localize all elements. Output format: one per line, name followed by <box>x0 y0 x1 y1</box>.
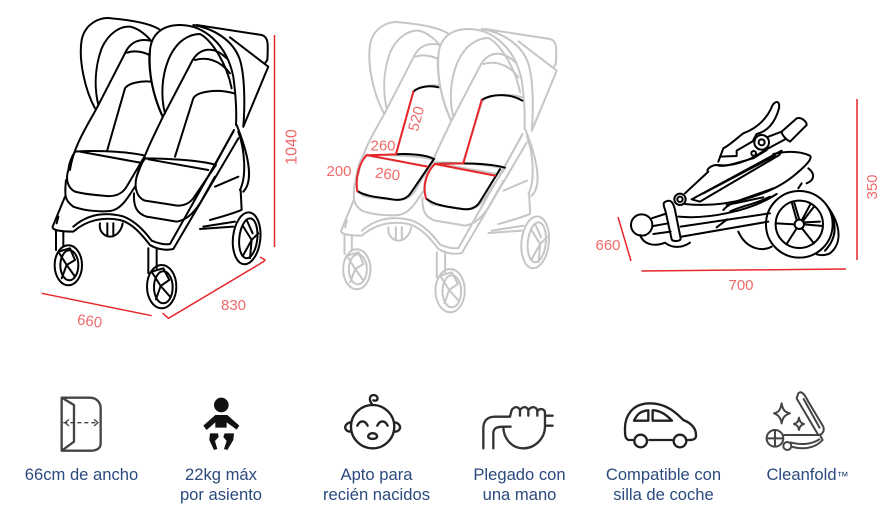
icon: car <box>625 403 696 447</box>
dimension line: width <box>618 217 631 261</box>
folded stroller with dimensions <box>595 99 881 294</box>
feature: suitable for newborns <box>323 395 430 504</box>
label: Cleanfold™ <box>766 465 849 484</box>
feature: 22kg per seat: por asiento <box>180 485 262 504</box>
dimension line: height <box>856 99 858 260</box>
label: 700: 700 <box>728 277 754 294</box>
icon: folding stroller with sparkles <box>767 392 824 450</box>
feature: suitable for newborns: recién nacidos <box>323 485 430 504</box>
label: 830: 830 <box>221 297 246 314</box>
stroller seat dimensions view <box>326 22 557 312</box>
label: 200: 200 <box>326 163 352 180</box>
icon: hand on handle <box>483 407 553 448</box>
rear wheel <box>738 191 839 258</box>
label: 260 upper: 260 <box>370 138 396 154</box>
icon: baby face <box>345 395 400 448</box>
red seat measure lines <box>357 92 495 198</box>
label: 660: 660 <box>595 237 621 254</box>
label: 66cm de ancho <box>25 465 138 484</box>
feature: one-hand fold <box>473 407 566 504</box>
stroller drawing <box>53 18 268 308</box>
label: 350: 350 <box>864 174 881 200</box>
label: Compatible con <box>606 465 721 484</box>
label: 22kg máx <box>185 465 258 484</box>
front roller <box>631 214 690 247</box>
label: Plegado con <box>473 465 566 484</box>
label: 520: 520 <box>405 105 428 133</box>
feature: one-hand fold: una mano <box>483 485 556 504</box>
dimension line: width <box>42 293 152 316</box>
dimension line: length <box>642 269 846 271</box>
upper handle assembly <box>718 102 807 165</box>
icon: width door <box>62 398 101 451</box>
label: Apto para <box>341 465 413 484</box>
feature: 22kg per seat <box>180 398 262 504</box>
stroller front view with dimensions <box>42 18 300 332</box>
feature: Cleanfold <box>766 392 849 484</box>
feature: car seat compatible <box>606 403 721 504</box>
dimension line: height <box>274 35 276 247</box>
feature: 66cm wide <box>25 398 138 484</box>
dimension line: depth <box>162 257 265 318</box>
label: 660: 660 <box>76 311 103 332</box>
feature: car seat compatible: silla de coche <box>613 485 714 504</box>
black seat outlines <box>358 86 522 209</box>
folded stroller drawing <box>631 102 839 258</box>
label: 1040: 1040 <box>284 129 300 165</box>
label: 260 lower: 260 <box>374 165 401 184</box>
icon: baby <box>203 398 239 450</box>
grey stroller drawing <box>341 22 557 312</box>
